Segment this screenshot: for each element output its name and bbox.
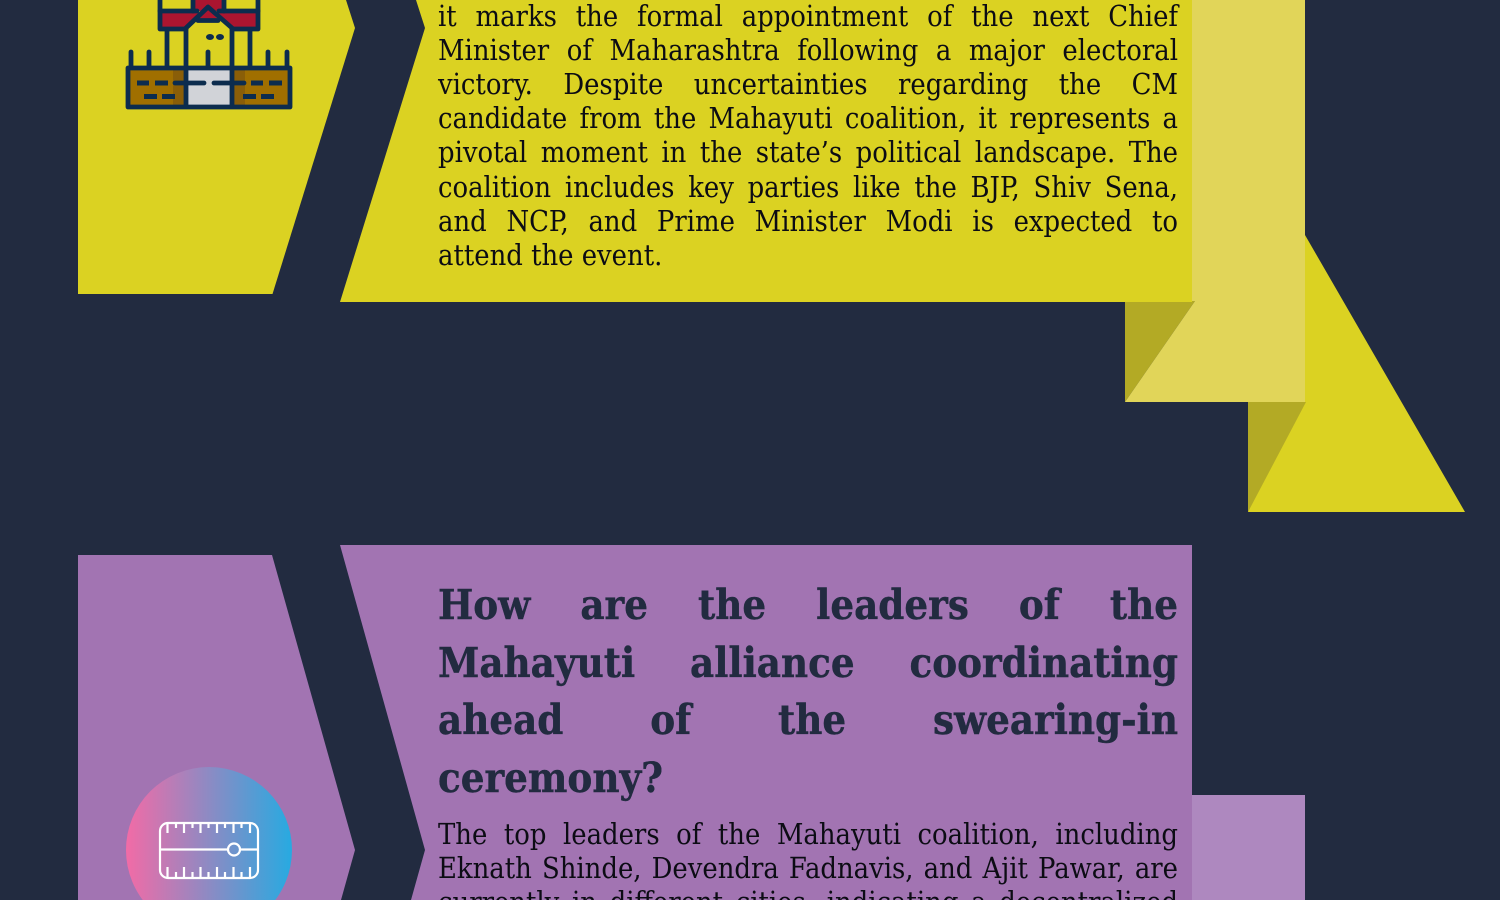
text block: swearing-in description bbox=[438, 0, 1180, 272]
text block: swearing-in description: candidate from the Mahayuti coalition, it represents a bbox=[438, 101, 1178, 135]
icon: government building bbox=[128, 0, 290, 107]
heading: leaders coordinating: ahead of the swearing-in bbox=[438, 695, 1178, 744]
text block: leaders description: The top leaders of the Mahayuti coalition, including bbox=[438, 817, 1178, 851]
panel: purple text banner bbox=[340, 545, 1192, 900]
heading: leaders coordinating: Mahayuti alliance coordinating bbox=[438, 638, 1178, 687]
panel: purple icon tab bbox=[78, 555, 355, 900]
icon: ruler badge bbox=[126, 767, 292, 900]
heading: leaders coordinating: ceremony? bbox=[438, 753, 663, 802]
text block: leaders description bbox=[438, 817, 1178, 900]
heading: leaders coordinating bbox=[438, 580, 1178, 802]
text block: swearing-in description: and NCP, and Prime Minister Modi is expected to bbox=[438, 204, 1178, 238]
panel: yellow fold bbox=[1125, 0, 1305, 402]
text block: swearing-in description: it marks the formal appointment of the next Chief bbox=[438, 0, 1178, 33]
text block: swearing-in description: pivotal moment in the state’s political landscape. The bbox=[438, 135, 1178, 169]
text block: swearing-in description: coalition includes key parties like the BJP, Shiv Sena, bbox=[438, 170, 1178, 204]
text block: leaders description: Eknath Shinde, Devendra Fadnavis, and Ajit Pawar, are bbox=[438, 851, 1178, 885]
panel: yellow ribbon tail bbox=[1248, 220, 1465, 512]
panel: yellow text banner bbox=[340, 0, 1192, 302]
panel: purple fold bbox=[1192, 795, 1305, 900]
panel: yellow icon tab bbox=[78, 0, 355, 294]
heading: leaders coordinating: How are the leaders of the bbox=[438, 580, 1178, 629]
text block: swearing-in description: victory. Despite uncertainties regarding the CM bbox=[438, 67, 1178, 101]
text block: swearing-in description: attend the event. bbox=[438, 238, 662, 272]
text block: swearing-in description: Minister of Maharashtra following a major electoral bbox=[438, 33, 1178, 67]
